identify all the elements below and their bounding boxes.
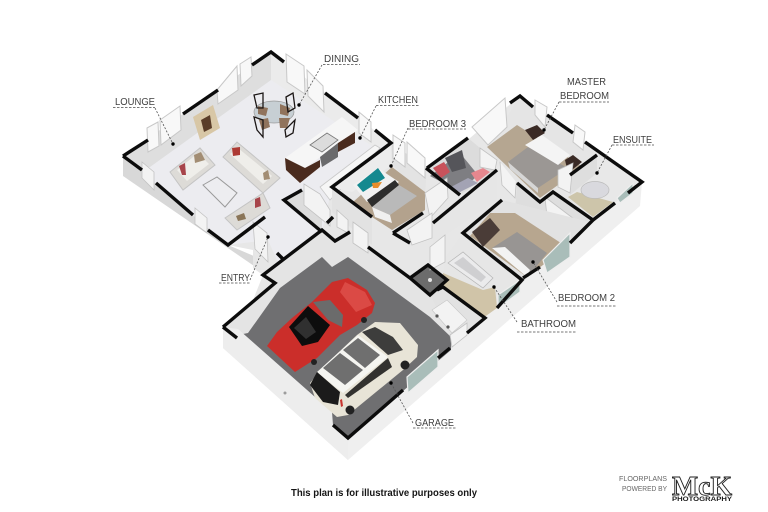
furniture: bedside tables (525, 125, 545, 140)
room: walk-in wardrobe (427, 138, 497, 195)
wall tops in black (123, 52, 642, 438)
leader lines and marker dots (155, 65, 612, 423)
furniture: main sofa (223, 142, 280, 193)
fixture: round shower (581, 182, 609, 198)
fixture: bathroom window (498, 280, 520, 308)
furniture: sofa left (170, 148, 215, 190)
footer disclaimer: This plan is for illustrative purposes only (291, 487, 477, 499)
label: garage: GARAGE (415, 418, 454, 429)
fixture: ensuite window (617, 183, 633, 203)
room: wet cell (410, 265, 447, 295)
icon: wall socket (284, 392, 286, 394)
label: ensuite: ENSUITE (613, 135, 652, 146)
room: ensuite (568, 155, 642, 220)
room: bathroom (443, 233, 522, 318)
furniture: double bed (508, 147, 568, 188)
window: bedroom 2 slider (543, 233, 570, 273)
windows and doors (142, 54, 585, 393)
furniture: kitchen island (285, 117, 358, 183)
furniture: dining table and chairs (254, 93, 295, 137)
furniture: small sofa (225, 193, 270, 230)
exterior walls of the house (123, 156, 642, 460)
label: entry: ENTRY (221, 273, 250, 284)
room: lounge and dining floor (123, 52, 391, 267)
room: master bedroom (487, 96, 597, 198)
fixture: bath (448, 252, 493, 288)
vehicle: red sports car (267, 278, 375, 372)
label: lounge: LOUNGE (115, 97, 155, 108)
logo: McK Photography: POWERED BY (622, 484, 667, 493)
label: master bedroom: BEDROOM (560, 91, 609, 102)
logo: McK Photography: McK (672, 471, 732, 501)
room: bedroom 2 (463, 200, 590, 278)
room: bedroom 3 (332, 143, 427, 245)
label: bedroom 2: BEDROOM 2 (558, 293, 615, 304)
logo: McK Photography: FLOORPLANS (619, 474, 667, 483)
furniture: bed (492, 232, 547, 277)
furniture: bedroom 3 bed (353, 168, 417, 223)
room: garage floor and walls (223, 230, 467, 460)
label: dining: DINING (324, 54, 359, 65)
label: master bedroom (559, 77, 609, 102)
room: kitchen side bench (320, 145, 380, 200)
furniture: fireplace (193, 105, 220, 140)
room: hallway walls (433, 162, 517, 243)
vehicle: white SUV (310, 322, 418, 417)
label: master bedroom: MASTER (567, 77, 606, 88)
room: corridor between master and bedroom 2 (515, 183, 593, 243)
label: bathroom: BATHROOM (521, 319, 576, 330)
house base between rooms (123, 52, 642, 438)
label: kitchen: KITCHEN (378, 95, 418, 106)
furniture: coffee table (203, 177, 237, 207)
logo: McK Photography (619, 471, 732, 503)
room: laundry (430, 287, 483, 337)
logo: McK Photography: PHOTOGRAPHY (672, 497, 732, 503)
label: bedroom 3: BEDROOM 3 (409, 119, 466, 130)
furniture: dresser (472, 218, 500, 247)
